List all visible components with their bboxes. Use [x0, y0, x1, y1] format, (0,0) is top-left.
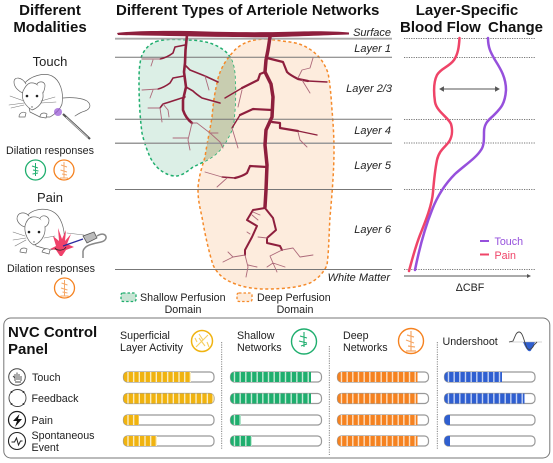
layer boundary lines [115, 39, 392, 270]
chart axis: delta CBF [404, 274, 531, 294]
layer labels: Layer 5 [354, 160, 392, 172]
arrow: double headed amplitude [440, 87, 499, 91]
heading: layer-specific blood flow change [400, 2, 543, 36]
legend: shallow perfusion domain: Domain [165, 304, 201, 316]
column heading: shallow networks: Shallow [237, 330, 275, 342]
illustration: mouse receiving pain [13, 209, 106, 258]
shallow arteriole network [142, 35, 223, 150]
row: pain [8, 412, 53, 428]
heading: different modalities: Different [19, 2, 81, 19]
legend: touch and pain: Pain [494, 250, 516, 262]
row: spontaneous event: Event [32, 442, 59, 454]
column heading: deep networks: Deep [343, 330, 369, 342]
bars: shallow networks [230, 372, 322, 446]
label: pain: Pain [37, 190, 63, 205]
row: pain: Pain [32, 415, 53, 427]
heading: layer-specific blood flow change: Blood Flow [400, 19, 481, 36]
panel: deep perfusion domain [198, 39, 334, 289]
panel: shallow perfusion domain [139, 39, 235, 176]
layer labels: Surface [353, 27, 391, 39]
heading: different modalities [13, 2, 87, 36]
illustration: mouse receiving touch [9, 74, 90, 139]
icon: undershoot wave [509, 332, 542, 351]
surface vessel [117, 31, 349, 37]
row: feedback: Feedback [32, 393, 79, 405]
heading: layer-specific blood flow change: Layer-Specific [416, 2, 518, 19]
row: spontaneous event [8, 430, 94, 454]
layer labels: Layer 4 [354, 125, 391, 137]
layer labels: Layer 2/3 [346, 83, 393, 95]
column heading: superficial layer activity: Layer Activity [120, 342, 184, 354]
column heading: deep networks [343, 330, 388, 354]
layer labels: Layer 1 [354, 43, 391, 55]
panel: domain overlap [203, 56, 236, 162]
label: touch: Touch [33, 54, 67, 69]
row: touch: Touch [32, 372, 61, 384]
row: spontaneous event: Spontaneous [32, 430, 94, 442]
heading: layer-specific blood flow change: Change [488, 19, 543, 36]
text: dilation responses pain: Dilation responses [7, 263, 95, 275]
icon: shallow networks [292, 329, 316, 354]
icon: deep networks [398, 328, 424, 354]
layer labels: White Matter [328, 272, 391, 284]
heading: arteriole networks: Different Types of Arteriole Networks [116, 2, 379, 19]
text: dilation responses touch: Dilation responses [6, 145, 94, 157]
column dividers [222, 342, 437, 455]
panel title: Panel [8, 341, 48, 358]
legend: shallow perfusion domain [121, 292, 226, 316]
icon: superficial layer activity [192, 330, 212, 352]
bars: undershoot [444, 372, 535, 446]
icon: deep response pain [54, 278, 74, 298]
legend: touch and pain [480, 236, 523, 262]
row: feedback [9, 390, 79, 406]
column heading: deep networks: Networks [343, 342, 388, 354]
bars: deep networks [338, 372, 428, 446]
dotted layer lines [404, 38, 536, 270]
legend: deep perfusion domain: Domain [277, 304, 313, 316]
heading: different modalities: Modalities [13, 19, 87, 36]
layer labels [328, 27, 393, 284]
legend: shallow perfusion domain: Shallow Perfusion [140, 292, 226, 304]
legend: deep perfusion domain: Deep Perfusion [257, 292, 331, 304]
column heading: shallow networks [237, 330, 282, 354]
bars: superficial layer activity [124, 372, 214, 446]
column heading: shallow networks: Networks [237, 342, 282, 354]
legend: deep perfusion domain [237, 292, 331, 316]
icon: deep response [54, 160, 74, 180]
panel title: NVC Control [8, 324, 97, 341]
panel title [8, 324, 97, 358]
column heading: superficial layer activity [120, 330, 184, 354]
icon: shallow response [26, 160, 46, 180]
chart: pain blood flow curve [409, 38, 460, 271]
column heading: undershoot: Undershoot [442, 336, 498, 348]
column heading: superficial layer activity: Superficial [120, 330, 170, 342]
chart axis: delta CBF: ΔCBF [456, 282, 485, 294]
legend: touch and pain: Touch [494, 236, 523, 248]
deep arteriole network [205, 37, 327, 277]
row: touch [9, 369, 61, 385]
layer labels: Layer 6 [354, 224, 392, 236]
panel: NVC control panel [4, 318, 550, 458]
chart: touch blood flow curve [415, 38, 506, 270]
